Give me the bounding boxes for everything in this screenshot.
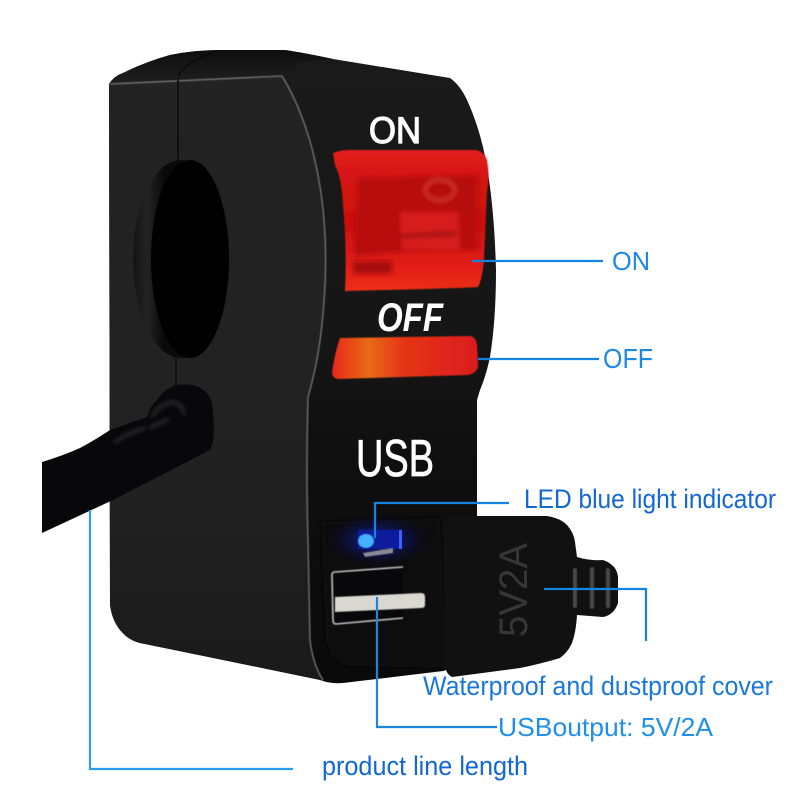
ON marking: ON — [369, 110, 421, 151]
handlebar hole — [133, 160, 229, 358]
cable — [42, 384, 214, 533]
leader line: OFF — [478, 358, 599, 360]
ON button inner window — [353, 175, 478, 274]
label: OFF: OFF — [603, 343, 653, 374]
USB port — [332, 567, 425, 624]
dust cover — [443, 516, 618, 677]
face edge highlight — [110, 76, 326, 680]
label: cover: Waterproof and dustproof cover — [423, 671, 773, 701]
label: ON: ON — [612, 246, 650, 276]
split line — [176, 52, 215, 392]
USB marking: USB — [356, 430, 434, 488]
leader line: product line — [90, 510, 293, 769]
leader line: USB output — [377, 597, 497, 727]
USB recess — [321, 518, 446, 668]
LED indicator — [323, 512, 433, 568]
top surface — [109, 50, 333, 84]
ON rocker button — [333, 150, 488, 291]
housing silhouette — [109, 50, 496, 683]
leader line: LED — [375, 503, 509, 538]
left face — [109, 76, 326, 680]
leader line: cover — [544, 589, 646, 641]
label: USB output: USBoutput: 5V/2A — [498, 712, 714, 742]
OFF marking: OFF — [377, 296, 444, 340]
USB tongue — [335, 593, 425, 612]
cover embossed text: 5V2A — [492, 543, 536, 637]
cover grip ridges — [575, 569, 608, 607]
label: LED indicator: LED blue light indicator — [524, 484, 776, 514]
cable highlight — [115, 402, 184, 442]
switch housing — [42, 50, 496, 683]
label: product line: product line length — [322, 751, 528, 781]
leader line: ON — [472, 260, 603, 262]
OFF rocker button — [332, 336, 478, 379]
